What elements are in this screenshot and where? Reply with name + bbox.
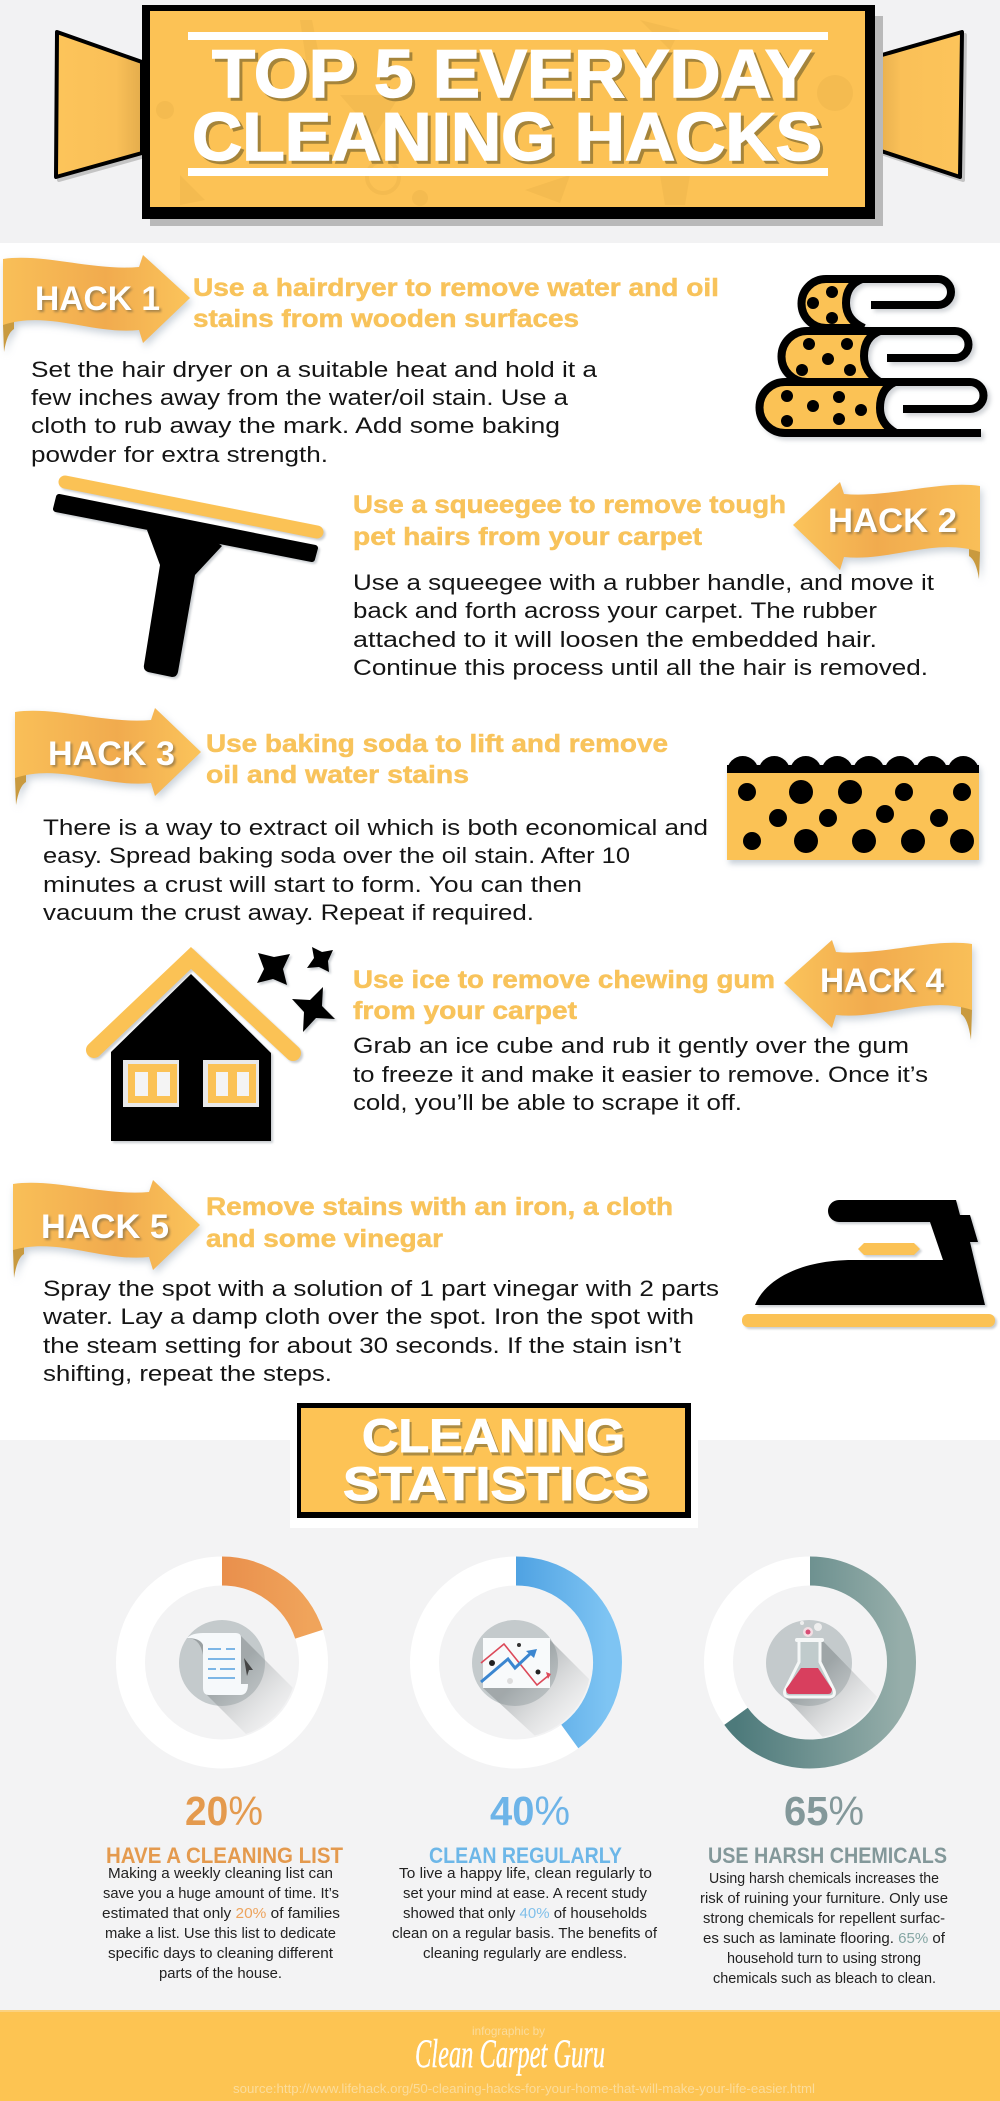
hack 1 body text: powder for extra strength. [31, 442, 328, 467]
icon: iron [742, 1200, 995, 1327]
hack 3 panel [15, 708, 979, 925]
stat 3 text block [700, 1788, 948, 1987]
hack 5 body text: the steam setting for about 30 seconds. If the stain isn’t [43, 1333, 681, 1358]
stat description: chemicals such as bleach to clean. [713, 1971, 936, 1987]
footer logo: Clean Carpet Guru [415, 2031, 605, 2076]
footer source: source:http://www.lifehack.org/50-cleaning-hacks-for-your-home-that-will-make-your-life-easier.html [233, 2081, 815, 2096]
hack 3 body text [43, 815, 708, 925]
icon: stacked towels [760, 279, 984, 433]
hack 5 heading: Remove stains with an iron, a cloth [206, 1193, 673, 1221]
stars [257, 947, 335, 1032]
hack 2 body text: back and forth across your carpet. The rubber [353, 598, 877, 623]
hack 1 body text [31, 357, 598, 467]
hack 1 body text: Set the hair dryer on a suitable heat and hold it a [31, 357, 598, 382]
hack 3 heading: oil and water stains [206, 761, 469, 789]
stat heading: CLEAN REGULARLY [429, 1843, 622, 1868]
stat description: Making a weekly cleaning list can [108, 1866, 333, 1882]
hack 2 label: HACK 2 [828, 502, 957, 540]
cleaning statistics heading: CLEANING [362, 1409, 625, 1462]
hack 2 heading: pet hairs from your carpet [353, 523, 703, 551]
stat heading: USE HARSH CHEMICALS [708, 1843, 947, 1868]
hack 5 heading: and some vinegar [206, 1225, 443, 1253]
hack 5 ribbon [13, 1180, 200, 1278]
stat description [392, 1866, 658, 1962]
stat description: risk of ruining your furniture. Only use [700, 1891, 948, 1907]
hack 2 body text: Continue this process until all the hair is removed. [353, 655, 928, 680]
stat description: set your mind at ease. A recent study [403, 1886, 648, 1902]
stat description: parts of the house. [159, 1966, 282, 1982]
hack 5 body text: water. Lay a damp cloth over the spot. Iron the spot with [42, 1304, 694, 1329]
hack 3 heading [206, 730, 668, 789]
icon: line chart [481, 1638, 551, 1688]
hack 2 heading [353, 491, 786, 551]
hack 1 heading [193, 274, 719, 333]
hack 4 heading [353, 966, 775, 1025]
left banner tail [56, 32, 142, 177]
hack 4 ribbon [784, 940, 972, 1040]
percentage: 65% [784, 1788, 864, 1834]
stat 2 text block [392, 1788, 658, 1962]
stat description: estimated that only 20% of families [102, 1906, 340, 1922]
hack 5 body text: Spray the spot with a solution of 1 part vinegar with 2 parts [43, 1276, 719, 1301]
hack 4 body text [353, 1033, 928, 1115]
stat description: es such as laminate flooring. 65% of [703, 1931, 946, 1947]
title text [192, 36, 822, 175]
hack 2 panel [56, 482, 980, 680]
stat description [102, 1866, 340, 1982]
hack 1 panel [3, 255, 984, 467]
stat description: save you a huge amount of time. It’s [103, 1886, 339, 1902]
hack 1 body text: few inches away from the water/oil stain. Use a [31, 385, 569, 410]
long shadow [206, 1636, 292, 1734]
long shadow [483, 1640, 589, 1736]
hack 2 heading: Use a squeegee to remove tough [353, 491, 786, 519]
hack 1 body text: cloth to rub away the mark. Add some baking [31, 413, 560, 438]
hack 5 label: HACK 5 [41, 1208, 169, 1246]
top towel [802, 279, 951, 328]
stat description: cleaning regularly are endless. [423, 1946, 627, 1962]
stat description: strong chemicals for repellent surfac- [703, 1911, 945, 1927]
hack 2 body text [353, 570, 934, 680]
icon: squeegee [56, 482, 317, 677]
hack 2 ribbon [793, 482, 980, 579]
hack 4 heading: Use ice to remove chewing gum [353, 966, 775, 994]
icon: flask [785, 1621, 834, 1697]
hack 5 body text [42, 1276, 719, 1386]
title box [142, 5, 883, 226]
windows [123, 1060, 259, 1107]
stat description: specific days to cleaning different [108, 1946, 333, 1962]
stat description: To live a happy life, clean regularly to [399, 1866, 652, 1882]
cleaning statistics heading: STATISTICS [343, 1457, 649, 1510]
hack 2 body text: Use a squeegee with a rubber handle, and move it [353, 570, 934, 595]
cleaning statistics heading [290, 1403, 698, 1528]
hack 1 heading: Use a hairdryer to remove water and oil [193, 274, 719, 302]
hack 3 ribbon [15, 708, 201, 805]
hack 4 body text: cold, you’ll be able to scrape it off. [353, 1090, 742, 1115]
percentage: 40% [490, 1788, 570, 1834]
icon: sponge [727, 756, 979, 860]
stat description: Using harsh chemicals increases the [709, 1871, 939, 1887]
title text: TOP 5 EVERYDAY [212, 36, 812, 112]
stat 1: donut chart 20% [130, 1571, 314, 1754]
hack 5 body text: shifting, repeat the steps. [43, 1361, 332, 1386]
footer [0, 2010, 1000, 2101]
hack 1 label: HACK 1 [35, 280, 160, 318]
stat heading: HAVE A CLEANING LIST [106, 1843, 344, 1868]
middle towel [782, 331, 968, 382]
stat description: make a list. Use this list to dedicate [105, 1926, 336, 1942]
hack 4 body text: Grab an ice cube and rub it gently over the gum [353, 1033, 909, 1058]
stat description [700, 1871, 948, 1987]
hack 3 label: HACK 3 [48, 735, 175, 773]
long shadow [785, 1642, 876, 1736]
stat description: clean on a regular basis. The benefits of [392, 1926, 658, 1942]
right banner tail [875, 32, 962, 177]
hack 1 heading: stains from wooden surfaces [193, 305, 579, 333]
house [94, 958, 293, 1141]
hack 4 body text: to freeze it and make it easier to remove. Once it’s [353, 1062, 928, 1087]
title text: CLEANING HACKS [192, 99, 822, 175]
hack 3 body text: There is a way to extract oil which is both economical and [43, 815, 708, 840]
hack 4 heading: from your carpet [353, 997, 578, 1025]
stat 2: donut chart 40% [424, 1571, 608, 1754]
hack 3 body text: minutes a crust will start to form. You can then [43, 872, 582, 897]
hack 5 heading [206, 1193, 673, 1253]
stat description: household turn to using strong [727, 1951, 921, 1967]
hack 3 heading: Use baking soda to lift and remove [206, 730, 668, 758]
percentage: 20% [185, 1788, 263, 1834]
icon: document [187, 1633, 253, 1695]
icon: house with stars [94, 947, 335, 1141]
hack 5 panel [13, 1180, 995, 1386]
hack 3 body text: vacuum the crust away. Repeat if required. [43, 900, 534, 925]
hack 3 body text: easy. Spread baking soda over the oil stain. After 10 [43, 843, 630, 868]
title banner [56, 5, 962, 226]
hack 1 ribbon [3, 255, 190, 352]
bottom towel [760, 382, 984, 433]
stat 1 text block [102, 1788, 344, 1982]
hack 4 label: HACK 4 [820, 962, 944, 1000]
footer credit: infographic by [472, 2024, 545, 2038]
stat 3: donut chart 65% [718, 1571, 902, 1754]
hack 2 body text: attached to it will loosen the embedded hair. [353, 627, 877, 652]
hack 4 panel [94, 940, 972, 1141]
stat description: showed that only 40% of households [403, 1906, 647, 1922]
